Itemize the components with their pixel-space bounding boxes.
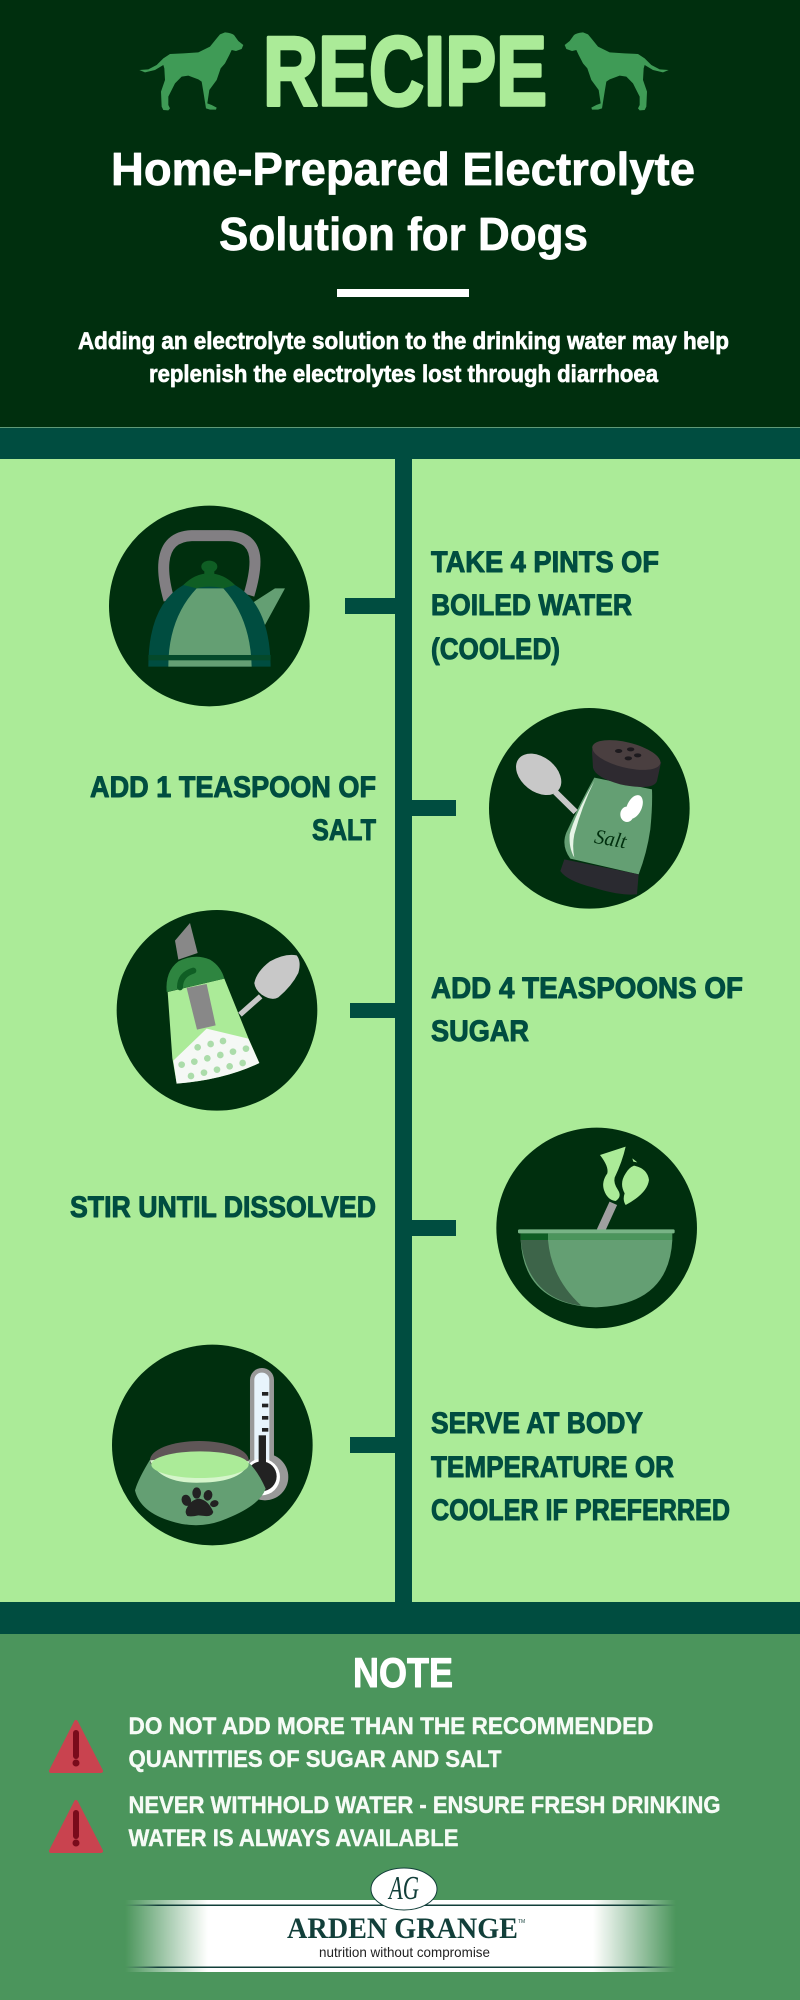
icon: warning 2 [51,1802,101,1851]
text: warning 1: QUANTITIES OF SUGAR AND SALT [128,1746,502,1773]
step 4 [70,1128,697,1328]
title: recipe: RECIPE [263,16,547,126]
text: step 1: (COOLED) [431,633,560,666]
heading: note: NOTE [353,1649,453,1696]
text: step 3: SUGAR [431,1015,529,1048]
text: step 1: BOILED WATER [431,589,632,622]
icon: dog bowl and thermometer [112,1345,313,1545]
label: salt: Salt [593,826,629,853]
text: warning 1: DO NOT ADD MORE THAN THE RECOMMENDED [128,1713,654,1740]
text: warning 2 [128,1792,720,1852]
icon: dog left [139,32,243,110]
connector [345,598,395,614]
text: step 5: SERVE AT BODY [431,1407,643,1440]
text: step 5: TEMPERATURE OR [431,1451,674,1484]
logo: arden grange: TM [518,1919,525,1925]
text: step 4: STIR UNTIL DISSOLVED [70,1191,376,1224]
connector [350,1437,395,1453]
text: intro: replenish the electrolytes lost through diarrhoea [149,361,659,388]
text: intro: Adding an electrolyte solution to the drinking water may help [78,328,729,355]
icon: mixing bowl [496,1128,697,1328]
text: step 1: TAKE 4 PINTS OF [431,546,659,579]
text: step 1 [431,546,659,666]
panel: header [0,0,800,428]
icon: paw [180,1487,220,1516]
text: warning 1 [128,1713,654,1773]
connector [350,1003,395,1018]
heading: subtitle [111,143,695,260]
step 5 [112,1345,730,1545]
step 1 [109,506,659,706]
text: step 3 [431,972,743,1048]
icon: kettle [109,506,310,706]
heading: subtitle: Home-Prepared Electrolyte [111,143,695,195]
logo: arden grange: AG [388,1870,419,1907]
icon: dog right [565,32,669,110]
text: warning 2: WATER IS ALWAYS AVAILABLE [128,1825,458,1852]
step 2 [90,708,690,909]
icon: salt shaker [489,708,690,909]
text: warning 2: NEVER WITHHOLD WATER - ENSURE FRESH DRINKING [128,1792,720,1819]
text: step 5 [431,1407,730,1527]
icon: warning 1 [51,1722,101,1771]
text: step 2 [90,771,376,847]
text: step 3: ADD 4 TEASPOONS OF [431,972,743,1005]
text: step 2: ADD 1 TEASPOON OF [90,771,376,804]
logo: arden grange: ARDEN GRANGE [287,1912,518,1945]
icon: sugar shaker [117,910,317,1111]
panel: note [0,1634,800,2000]
logo: arden grange [125,1868,676,1972]
text: step 5: COOLER IF PREFERRED [431,1494,730,1527]
text: intro [78,328,729,388]
logo: arden grange: nutrition without compromise [319,1944,490,1960]
step 3 [117,910,743,1111]
connector [412,1220,456,1236]
text: step 2: SALT [312,814,376,847]
panel: steps [0,428,800,1634]
connector [412,800,456,816]
heading: subtitle: Solution for Dogs [219,208,588,260]
